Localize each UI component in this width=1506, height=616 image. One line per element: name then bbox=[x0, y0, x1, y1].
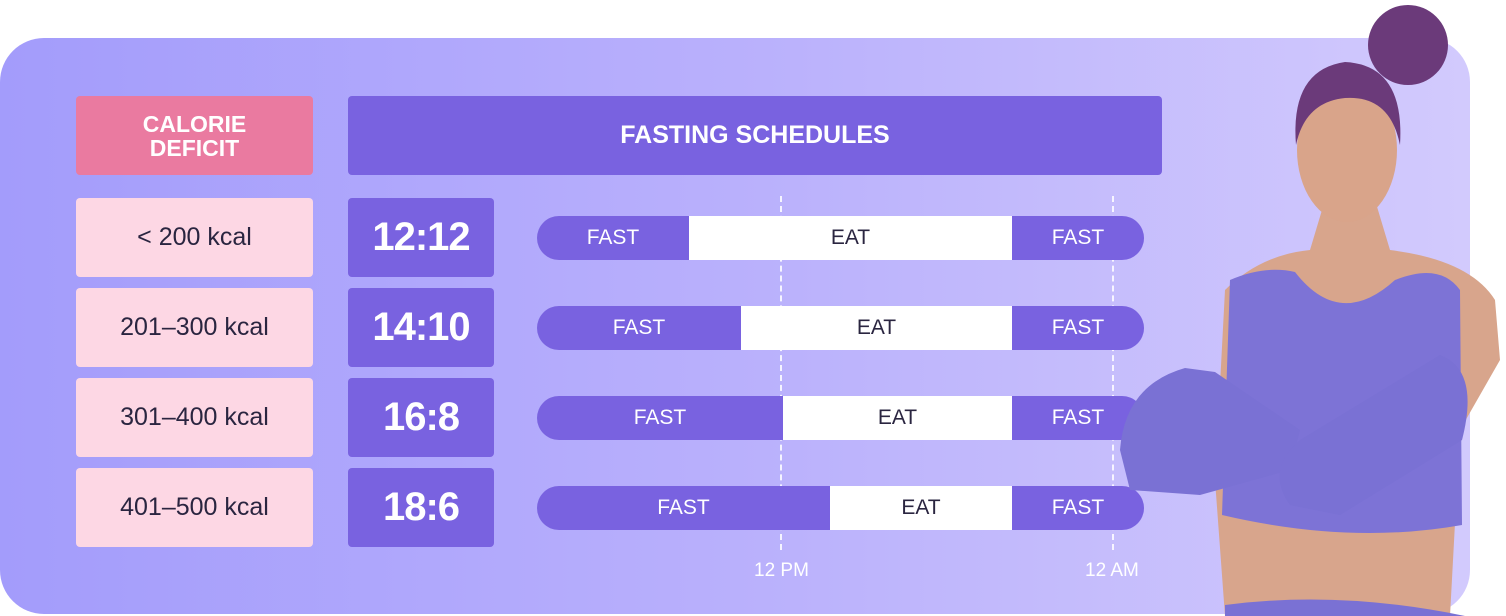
bar 1 bbox=[537, 216, 1144, 260]
bar 1: FAST bbox=[587, 226, 639, 249]
bar 4: EAT bbox=[901, 496, 941, 519]
bar 1: FAST bbox=[1052, 226, 1104, 249]
bar 1: EAT bbox=[831, 226, 870, 249]
bar 3: FAST bbox=[634, 406, 686, 429]
label 3: 301–400 kcal bbox=[120, 403, 269, 431]
schedule 16:8 bbox=[348, 378, 494, 457]
bar 2 bbox=[537, 306, 1144, 350]
header: fasting schedules: FASTING SCHEDULES bbox=[620, 121, 890, 149]
label 1 bbox=[76, 198, 313, 277]
bar 4: FAST bbox=[657, 496, 710, 519]
tick 12 AM: 12 AM bbox=[1085, 560, 1139, 581]
bar 2: FAST bbox=[1052, 316, 1104, 339]
header: fasting schedules bbox=[348, 96, 1162, 175]
bar 3 bbox=[537, 396, 1144, 440]
schedule 16:8: 16:8 bbox=[383, 395, 459, 439]
bar 4 bbox=[537, 486, 1144, 530]
header: calorie deficit bbox=[76, 96, 313, 175]
header: calorie deficit: DEFICIT bbox=[150, 134, 239, 160]
bar 2: FAST bbox=[613, 316, 665, 339]
header: calorie deficit: CALORIE bbox=[143, 110, 246, 136]
schedule 14:10: 14:10 bbox=[372, 305, 470, 349]
bar 3: FAST bbox=[1052, 406, 1104, 429]
schedule 12:12: 12:12 bbox=[372, 215, 470, 259]
schedule 14:10 bbox=[348, 288, 494, 367]
tick 12 PM: 12 PM bbox=[754, 560, 809, 581]
label 1: < 200 kcal bbox=[137, 223, 252, 251]
schedule 12:12 bbox=[348, 198, 494, 277]
label 2 bbox=[76, 288, 313, 367]
bar 2: EAT bbox=[857, 316, 896, 339]
illustration: woman bbox=[1120, 5, 1500, 616]
label 3 bbox=[76, 378, 313, 457]
label 4 bbox=[76, 468, 313, 547]
label 4: 401–500 kcal bbox=[120, 493, 269, 521]
bar 4: FAST bbox=[1052, 496, 1104, 519]
schedule 18:6: 18:6 bbox=[383, 485, 459, 529]
schedule 18:6 bbox=[348, 468, 494, 547]
label 2: 201–300 kcal bbox=[120, 313, 269, 341]
dashed line 12 PM bbox=[780, 196, 782, 550]
bar 3: EAT bbox=[878, 406, 917, 429]
dashed line 12 AM bbox=[1112, 196, 1114, 550]
